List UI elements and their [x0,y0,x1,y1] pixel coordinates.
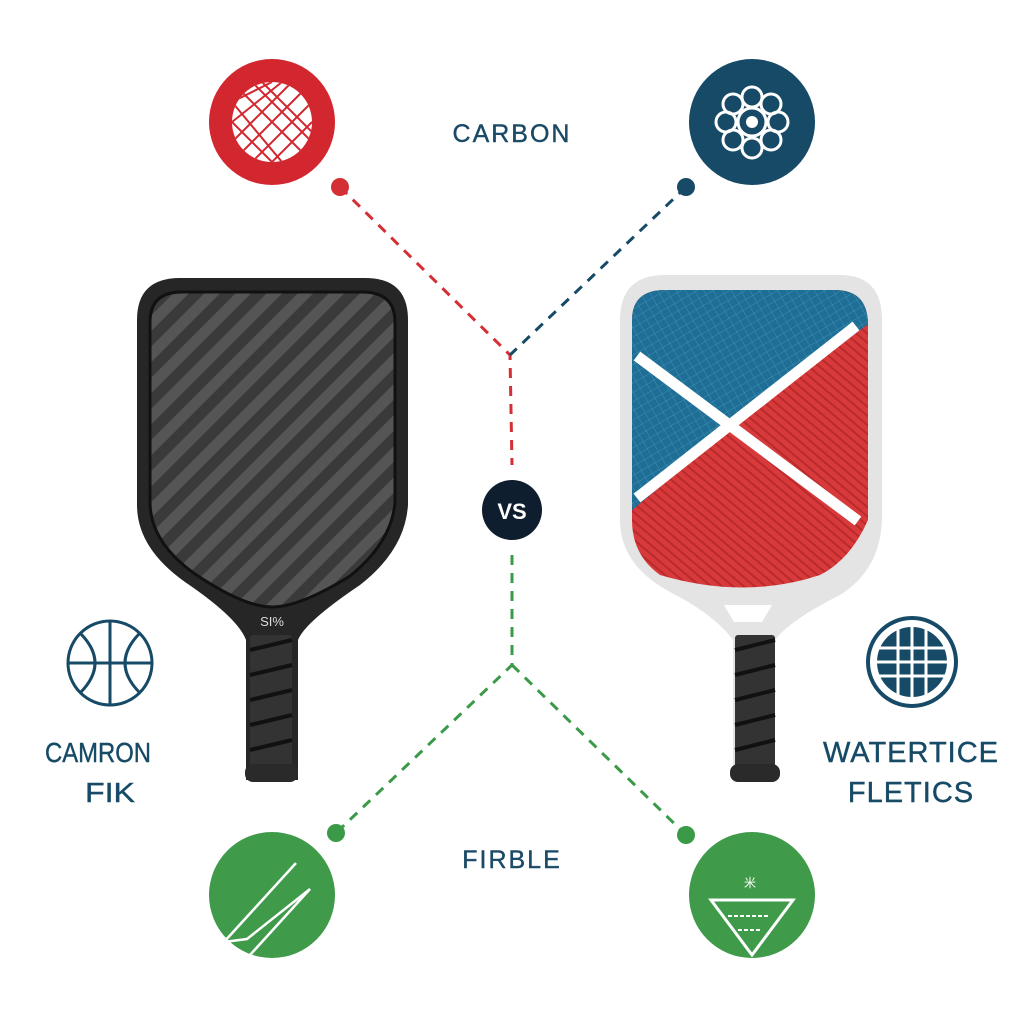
heading: FIRBLE: FIRBLE [462,846,562,874]
connector: green dashed lines [327,555,695,844]
VS badge: VS [497,499,527,524]
icon: green triangle circle [689,832,815,958]
connector: red dashed line [331,178,512,465]
label: WATERTICE FLETICS [823,737,999,809]
VS badge [482,480,542,540]
icon: left globe outline [68,621,152,705]
label: CAMRON FIK: FIK [85,777,135,808]
icon: right grid circle [868,618,956,706]
icon: navy flower circle [689,59,815,185]
connector: navy dashed line [510,178,695,355]
icon: green slash circle [209,832,335,958]
label: CAMRON FIK: CAMRON [45,737,151,768]
icon: red net circle [209,59,335,185]
paddle: black carbon [137,278,408,782]
heading: CARBON: CARBON [453,120,571,148]
paddle: blue/red [620,275,882,782]
paddle: black carbon: SI% [260,614,284,629]
label: WATERTICE FLETICS: FLETICS [848,777,974,809]
label: WATERTICE FLETICS: WATERTICE [823,737,999,769]
label: CAMRON FIK [45,737,151,808]
icon: green triangle circle: 米 [744,876,756,890]
